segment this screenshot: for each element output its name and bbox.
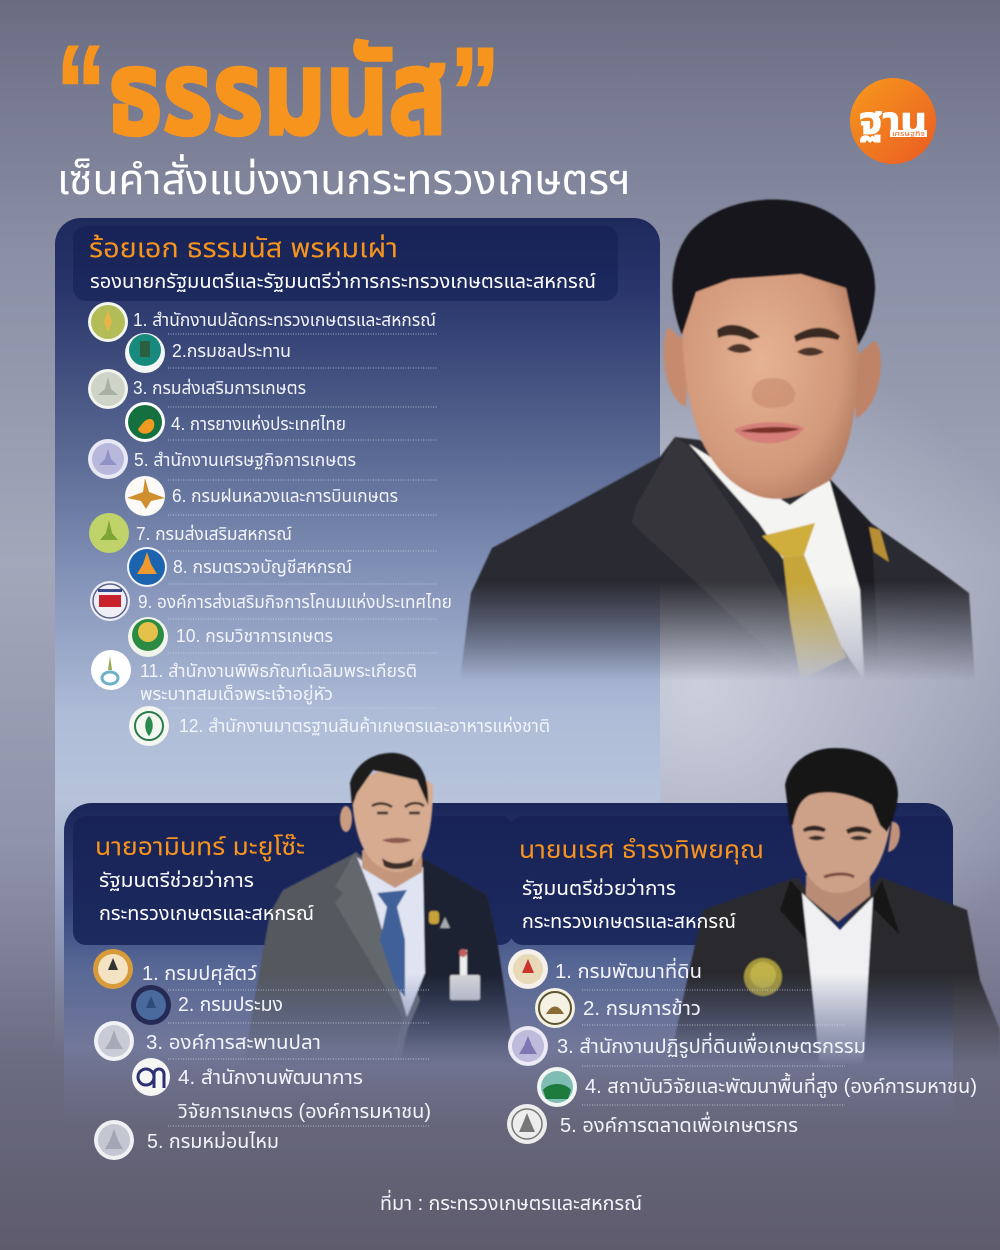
agency 2: 2.กรมชลประทาน [172, 341, 291, 361]
title: ธรรมนัส [108, 28, 447, 160]
list: Naret agencies [507, 949, 977, 1144]
agency 5 [94, 1120, 279, 1160]
list: Amin agencies [93, 949, 431, 1160]
agency 6 [125, 476, 398, 516]
portrait: Thammanat [460, 200, 975, 680]
agency 10 [128, 617, 333, 657]
agency 4: 4. สถาบันวิจัยและพัฒนาพื้นที่สูง (องค์การมหาชน) [585, 1072, 977, 1099]
agency 1 [88, 302, 436, 342]
heading: Naret [519, 836, 764, 933]
portrait: Naret [670, 748, 1000, 1065]
heading: Naret: นายนเรศ ธำรงทิพยคุณ [519, 836, 764, 865]
heading: Naret: กระทรวงเกษตรและสหกรณ์ [522, 911, 736, 933]
agency 1 [93, 949, 257, 989]
heading: Amin: กระทรวงเกษตรและสหกรณ์ [99, 903, 314, 925]
heading: Naret: รัฐมนตรีช่วยว่าการ [522, 877, 676, 900]
agency 4 [537, 1067, 977, 1107]
box: Naret header [510, 816, 953, 945]
agency 11: 11. สำนักงานพิพิธภัณฑ์เฉลิมพระเกียรติ [140, 661, 417, 681]
agency 4 [125, 402, 346, 442]
agency 1: 1. สำนักงานปลัดกระทรวงเกษตรและสหกรณ์ [133, 310, 436, 330]
agency 4: วิจัยการเกษตร (องค์การมหาชน) [177, 1101, 431, 1123]
agency 7 [89, 513, 292, 553]
agency 2: 2. กรมการข้าว [583, 997, 701, 1020]
agency 9: 9. องค์การส่งเสริมกิจการโคนมแห่งประเทศไทย [138, 592, 452, 612]
agency 5 [507, 1104, 798, 1144]
agency 4 [132, 1058, 431, 1123]
title: “ [56, 18, 106, 164]
heading: Amin: รัฐมนตรีช่วยว่าการ [99, 869, 254, 892]
agency 5: 5. สำนักงานเศรษฐกิจการเกษตร [134, 450, 356, 470]
agency 1 [508, 949, 702, 989]
portrait: Amin [245, 753, 516, 1065]
agency 3 [508, 1026, 866, 1066]
logo: Thansettakij: เศรษฐกิจ [892, 131, 925, 138]
agency 6: 6. กรมฝนหลวงและการบินเกษตร [172, 486, 398, 506]
agency 3 [88, 369, 306, 409]
agency 1: 1. กรมปศุสัตว์ [142, 963, 257, 985]
logo: Thansettakij: ฐาน [859, 101, 927, 143]
agency 5: 5. กรมหม่อนไหม [147, 1130, 279, 1153]
panel: deputy ministers [64, 803, 953, 1130]
box: lead minister header [73, 226, 618, 301]
agency 3 [94, 1021, 321, 1061]
heading: lead minister: ร้อยเอก ธรรมนัส พรหมเผ่า [89, 233, 398, 263]
agency 5: 5. องค์การตลาดเพื่อเกษตรกร [560, 1111, 798, 1137]
agency 11 [91, 650, 417, 706]
title: ” [450, 20, 500, 166]
agency 7: 7. กรมส่งเสริมสหกรณ์ [136, 524, 292, 544]
agency 5 [88, 439, 356, 479]
agency 3: 3. สำนักงานปฏิรูปที่ดินเพื่อเกษตรกรรม [557, 1032, 866, 1059]
agency 11: พระบาทสมเด็จพระเจ้าอยู่หัว [140, 684, 333, 706]
agency 12: 12. สำนักงานมาตรฐานสินค้าเกษตรและอาหารแห่งชาติ [179, 716, 550, 736]
heading: Amin [95, 833, 314, 925]
agency 10: 10. กรมวิชาการเกษตร [176, 626, 333, 646]
agency 2 [535, 988, 701, 1028]
heading: Amin: นายอามินทร์ มะยูโซ๊ะ [95, 833, 305, 862]
agency 12 [129, 706, 550, 746]
agency 2 [131, 985, 283, 1025]
agency 8 [127, 547, 352, 587]
list: lead minister agencies [88, 302, 550, 746]
agency 2 [125, 333, 291, 373]
agency 1: 1. กรมพัฒนาที่ดิน [555, 957, 702, 983]
agency 2: 2. กรมประมง [178, 994, 283, 1016]
agency 3: 3. องค์การสะพานปลา [146, 1032, 321, 1054]
logo: Thansettakij [850, 78, 936, 164]
heading: lead minister [89, 233, 596, 293]
agency 3: 3. กรมส่งเสริมการเกษตร [133, 378, 306, 398]
source note: ที่มา : กระทรวงเกษตรและสหกรณ์ [380, 1189, 642, 1215]
panel: lead minister [55, 218, 660, 1060]
agency 4: 4. สำนักงานพัฒนาการ [178, 1067, 363, 1089]
box: Amin header [73, 816, 513, 945]
agency 4: 4. การยางแห่งประเทศไทย [171, 414, 346, 434]
subtitle: เซ็นคำสั่งแบ่งงานกระทรวงเกษตรฯ [57, 153, 631, 203]
agency 8: 8. กรมตรวจบัญชีสหกรณ์ [173, 557, 352, 577]
heading: lead minister: รองนายกรัฐมนตรีและรัฐมนตรีว่าการกระทรวงเกษตรและสหกรณ์ [90, 270, 596, 293]
agency 9 [90, 581, 452, 621]
